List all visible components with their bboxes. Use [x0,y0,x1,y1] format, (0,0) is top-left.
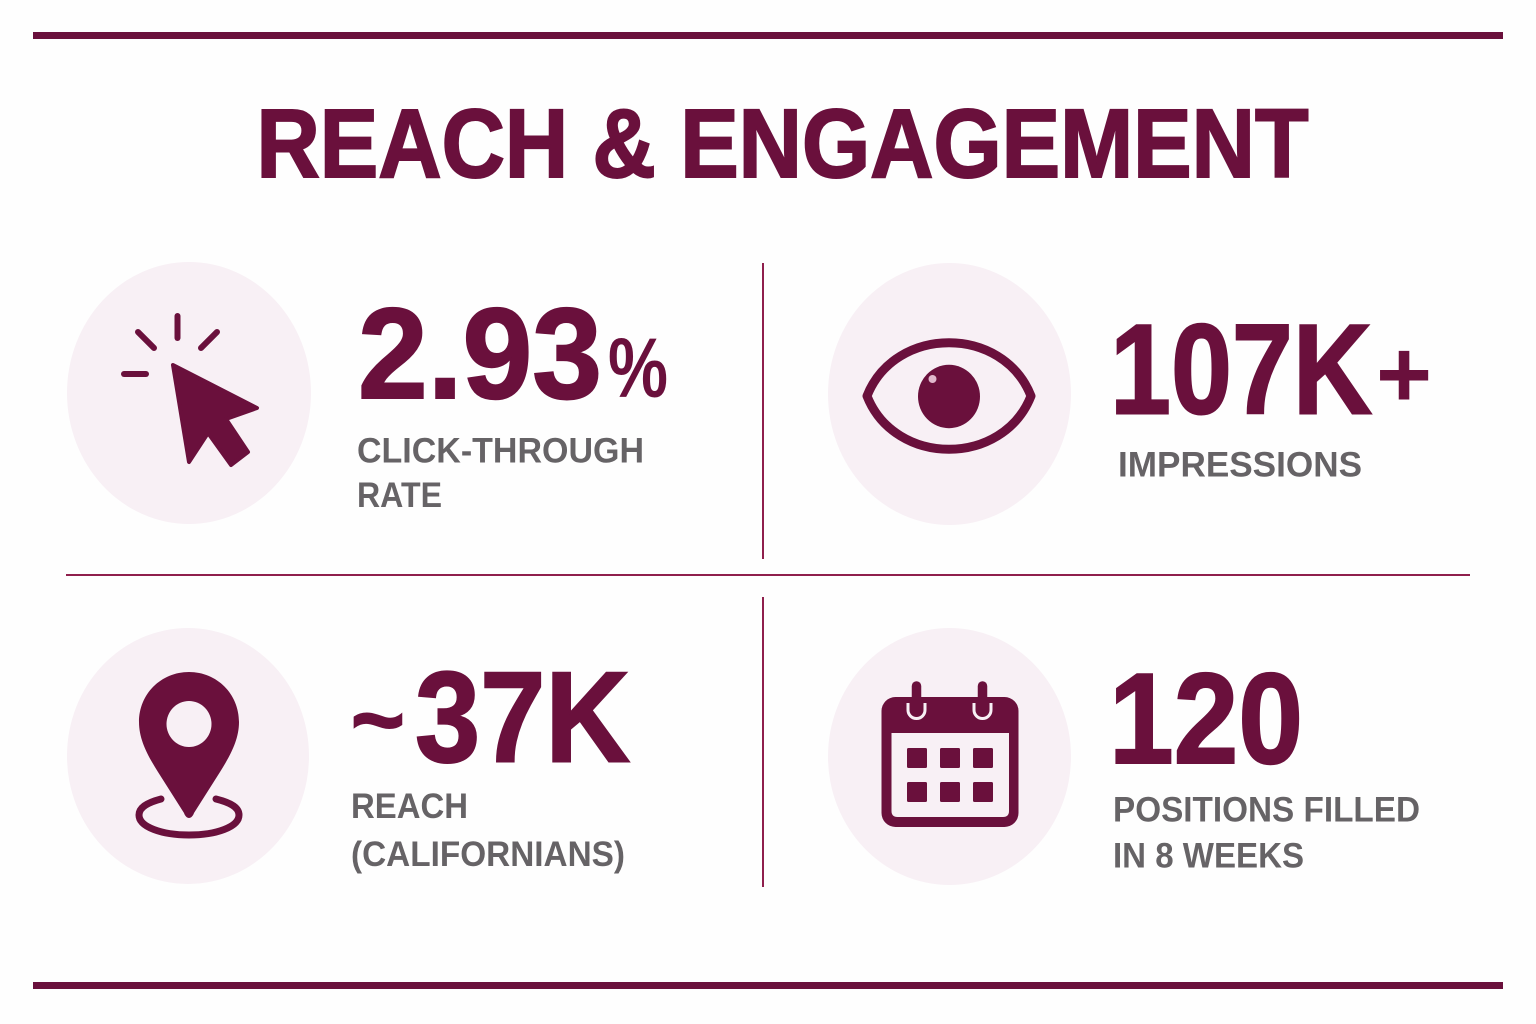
stat: 2.93: 2.93 [358,282,602,426]
icon: map pin [67,628,309,884]
icon: calendar [828,628,1071,885]
stat: 107K: 107K [1110,298,1372,442]
stat: 120: 120 [1109,647,1303,791]
label: click-through rate: CLICK-THROUGH [357,432,644,470]
label: reach Californians [351,787,625,874]
label: impressions: IMPRESSIONS [1118,446,1362,484]
icon: cursor click [67,262,311,524]
title: REACH & ENGAGEMENT [256,89,1308,198]
label: reach Californians: REACH [351,787,468,826]
label: reach Californians: (CALIFORNIANS) [351,835,625,874]
stat suffix: plus: + [1376,321,1432,428]
label: positions filled in 8 weeks [1113,790,1420,876]
label: positions filled in 8 weeks: POSITIONS FILLED [1113,790,1420,830]
bottom rule [33,982,1503,989]
panel: impressions [828,263,1432,525]
stat: tilde: ~ [351,669,405,771]
label: click-through rate [357,432,644,515]
stat unit: percent: % [608,321,668,415]
stat: 37K: 37K [415,646,630,790]
panel: click-through rate [67,262,668,524]
panel: reach [67,628,630,884]
top rule [33,32,1503,39]
label: click-through rate: RATE [357,476,442,515]
icon: eye [828,263,1071,525]
panel: positions filled [828,628,1420,885]
label: positions filled in 8 weeks: IN 8 WEEKS [1113,836,1304,876]
